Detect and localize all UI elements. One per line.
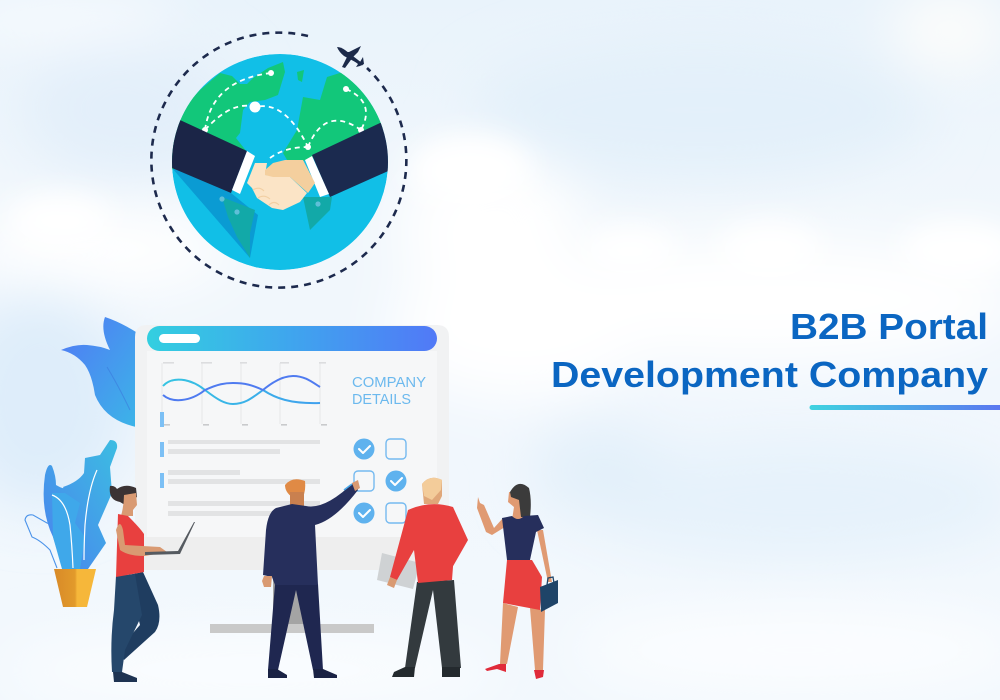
pot (54, 569, 96, 607)
hair (510, 484, 531, 517)
hand (387, 577, 397, 588)
folder (377, 553, 420, 589)
head (422, 478, 442, 504)
plant leaves behind board (61, 317, 136, 427)
neck (290, 492, 304, 508)
header pill (159, 334, 200, 343)
leaf veins (52, 470, 97, 568)
hair (422, 478, 442, 500)
left sleeve (165, 120, 247, 193)
person: man in red sweater (377, 478, 468, 677)
hands (262, 480, 360, 587)
potted plant (25, 440, 117, 607)
navy top (502, 515, 544, 560)
dashboard board (135, 325, 449, 633)
shoes (392, 667, 460, 677)
red top (116, 514, 144, 577)
globe handshake illustration (151, 33, 406, 288)
handbag (540, 577, 558, 612)
pants (268, 584, 323, 670)
shoes (113, 672, 137, 682)
face (121, 493, 137, 516)
legs (500, 603, 545, 670)
dashed flight path ring (151, 33, 406, 288)
back leaf (44, 440, 117, 569)
arm and finger (477, 497, 505, 535)
hair (110, 486, 137, 505)
title underline (810, 405, 1000, 410)
shoes (485, 664, 544, 679)
left cuff (232, 151, 255, 194)
sweater (390, 504, 468, 583)
icon: airplane (337, 46, 364, 68)
jacket (263, 482, 358, 585)
text block placeholder rows (160, 412, 320, 516)
person: woman with laptop (110, 486, 195, 682)
right cuff (305, 156, 329, 197)
title: B2B Portal (790, 306, 988, 347)
red skirt (503, 560, 542, 610)
right sleeve (312, 123, 395, 197)
checklist icons (354, 438, 406, 524)
board stand (210, 570, 374, 633)
line chart (162, 362, 327, 426)
outlined leaf (25, 515, 65, 568)
company details label: DETAILS (352, 392, 411, 408)
company details label: COMPANY (352, 375, 426, 391)
title: Development Company (551, 354, 988, 395)
person: man in navy suit (262, 479, 360, 678)
shoes (268, 669, 337, 678)
handshake (247, 160, 315, 210)
board panel (135, 325, 449, 570)
header bar (147, 326, 437, 351)
pants (405, 580, 461, 668)
hair (285, 479, 305, 497)
arm (116, 524, 167, 556)
front leaf (52, 493, 85, 569)
laptop (145, 522, 195, 555)
title (551, 306, 988, 395)
straight leg (111, 574, 142, 672)
bent leg (118, 572, 159, 660)
person: woman with handbag (477, 484, 558, 679)
back arm (537, 530, 552, 582)
marker (344, 484, 352, 490)
face (508, 492, 524, 520)
globe with continents (165, 54, 395, 270)
